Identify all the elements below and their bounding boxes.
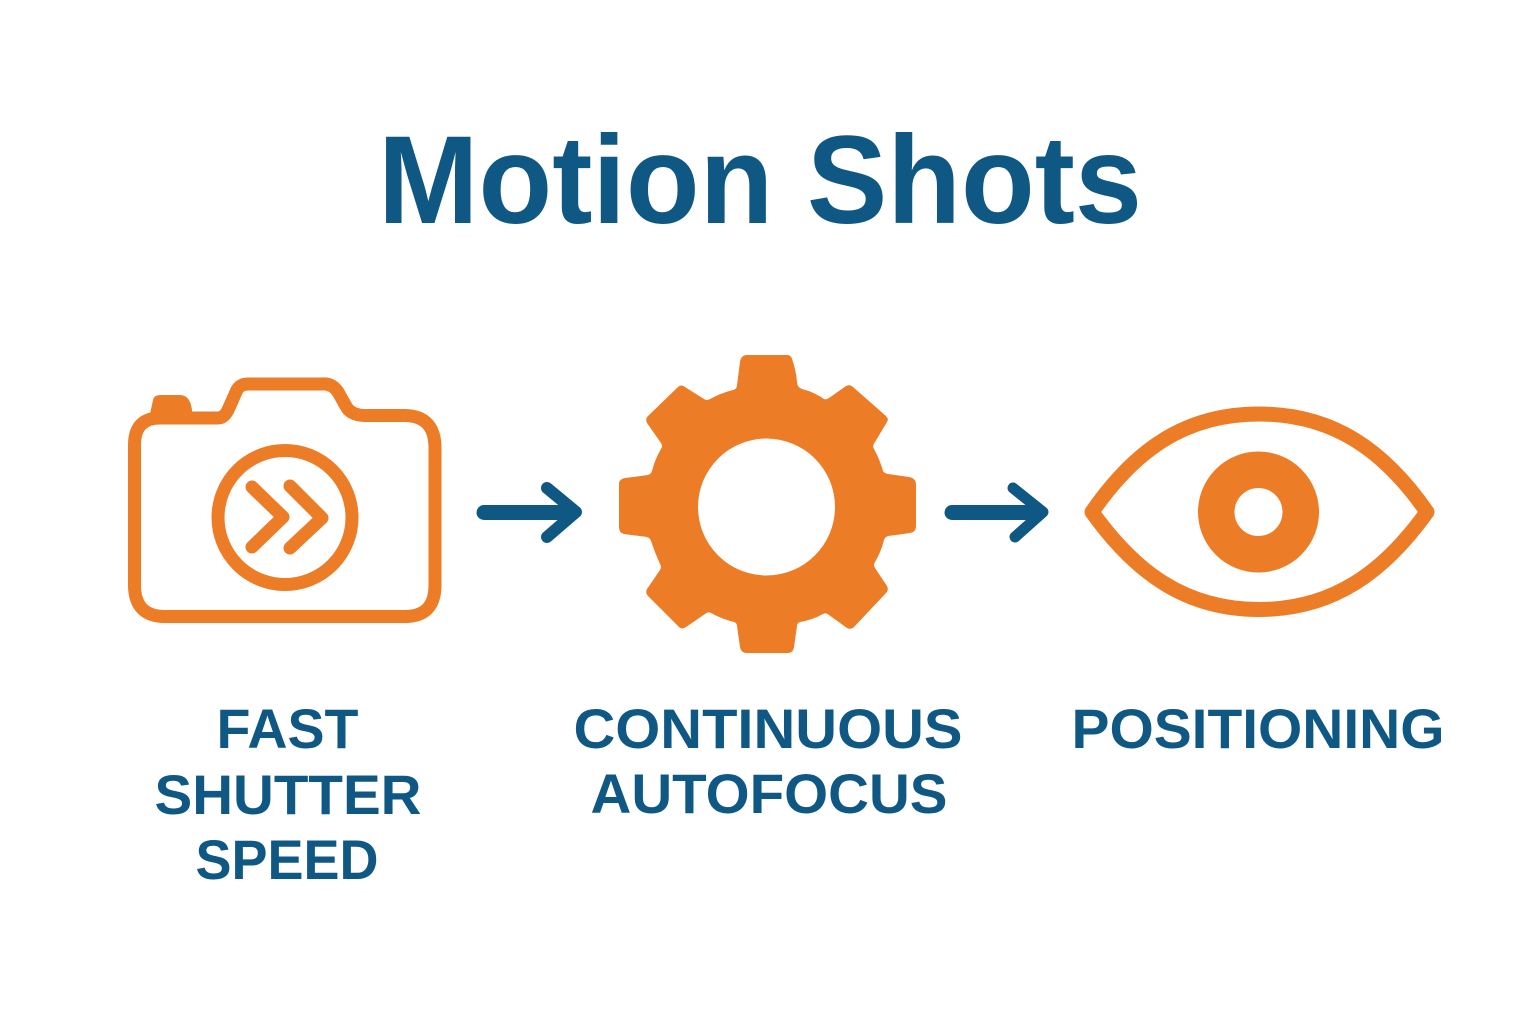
icon: camera [134,384,435,616]
icon: eye [1092,414,1427,610]
icon: gear [619,355,916,653]
arrow: gear to eye [952,488,1043,537]
title: Motion Shots [378,111,1142,250]
arrow: camera to gear [484,488,576,537]
label: fast shutter speed: FAST [216,697,358,760]
label: fast shutter speed: SPEED [196,828,378,891]
label: continuous autofocus: AUTOFOCUS [590,762,948,825]
label: fast shutter speed: SHUTTER [154,763,422,826]
label: positioning: POSITIONING [1072,697,1444,760]
label: continuous autofocus: CONTINUOUS [574,697,962,760]
label: fast shutter speed [154,697,422,891]
label: continuous autofocus [574,697,962,825]
